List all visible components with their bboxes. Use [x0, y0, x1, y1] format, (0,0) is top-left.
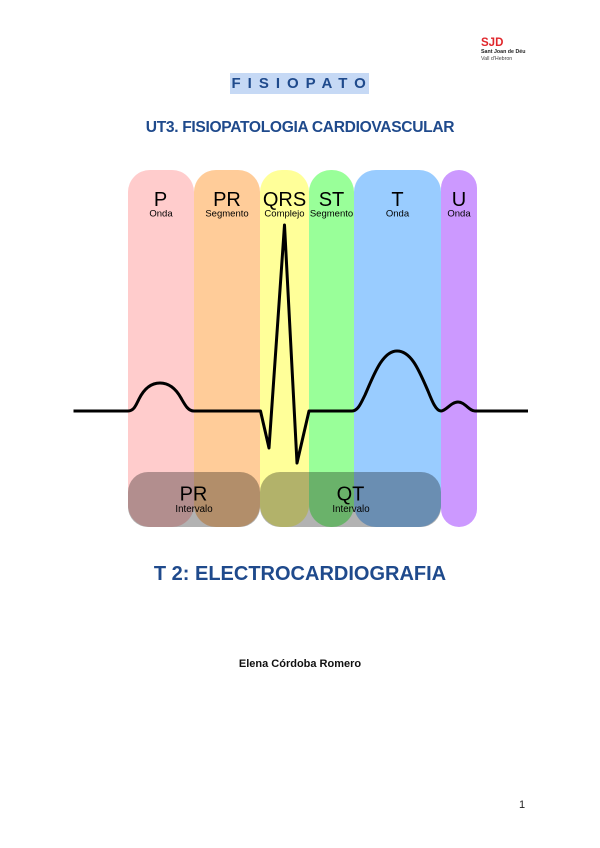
panel: ST segment column: Segmento — [310, 208, 353, 220]
panel: QT interval: Intervalo — [332, 504, 370, 515]
logo: SJD: Vall d'Hebron — [481, 56, 512, 62]
logo: SJD — [481, 37, 526, 62]
page number: 1 — [519, 799, 525, 811]
panel: U wave column — [441, 170, 477, 527]
panel: T wave column — [354, 170, 441, 527]
title: FISIOPATO: FISIOPATO — [232, 75, 373, 92]
author: Elena Córdoba Romero — [239, 658, 361, 670]
panel: T wave column: Onda — [386, 208, 410, 220]
logo: SJD: SJD — [481, 37, 503, 49]
panel: P wave column: P — [154, 189, 167, 211]
panel: QT interval: QT — [337, 484, 364, 506]
logo: SJD: Sant Joan de Déu — [481, 49, 525, 55]
panel: P wave column: Onda — [149, 208, 173, 220]
panel: PR interval — [128, 472, 260, 527]
panel: QRS complex column: Complejo — [264, 208, 305, 220]
heading: T 2: T 2: ELECTROCARDIOGRAFIA — [154, 563, 446, 585]
panel: ST segment column: ST — [319, 189, 344, 211]
panel: T wave column: T — [391, 189, 404, 211]
subtitle: UT3: UT3. FISIOPATOLOGIA CARDIOVASCULAR — [146, 119, 454, 136]
panel: PR segment column: Segmento — [205, 208, 249, 220]
line: ECG trace — [74, 225, 528, 463]
panel: ST segment column — [309, 170, 354, 527]
panel: PR segment column — [194, 170, 260, 527]
panel: PR interval: Intervalo — [175, 504, 213, 515]
panel: QRS complex column — [260, 170, 309, 527]
panel: QT interval — [260, 472, 441, 527]
panel: PR interval: PR — [180, 484, 207, 506]
panel: U wave column: U — [452, 189, 466, 211]
panel: PR segment column: PR — [213, 189, 241, 211]
panel: QRS complex column: QRS — [263, 189, 306, 211]
panel: U wave column: Onda — [447, 208, 471, 220]
panel: P wave column — [128, 170, 194, 527]
